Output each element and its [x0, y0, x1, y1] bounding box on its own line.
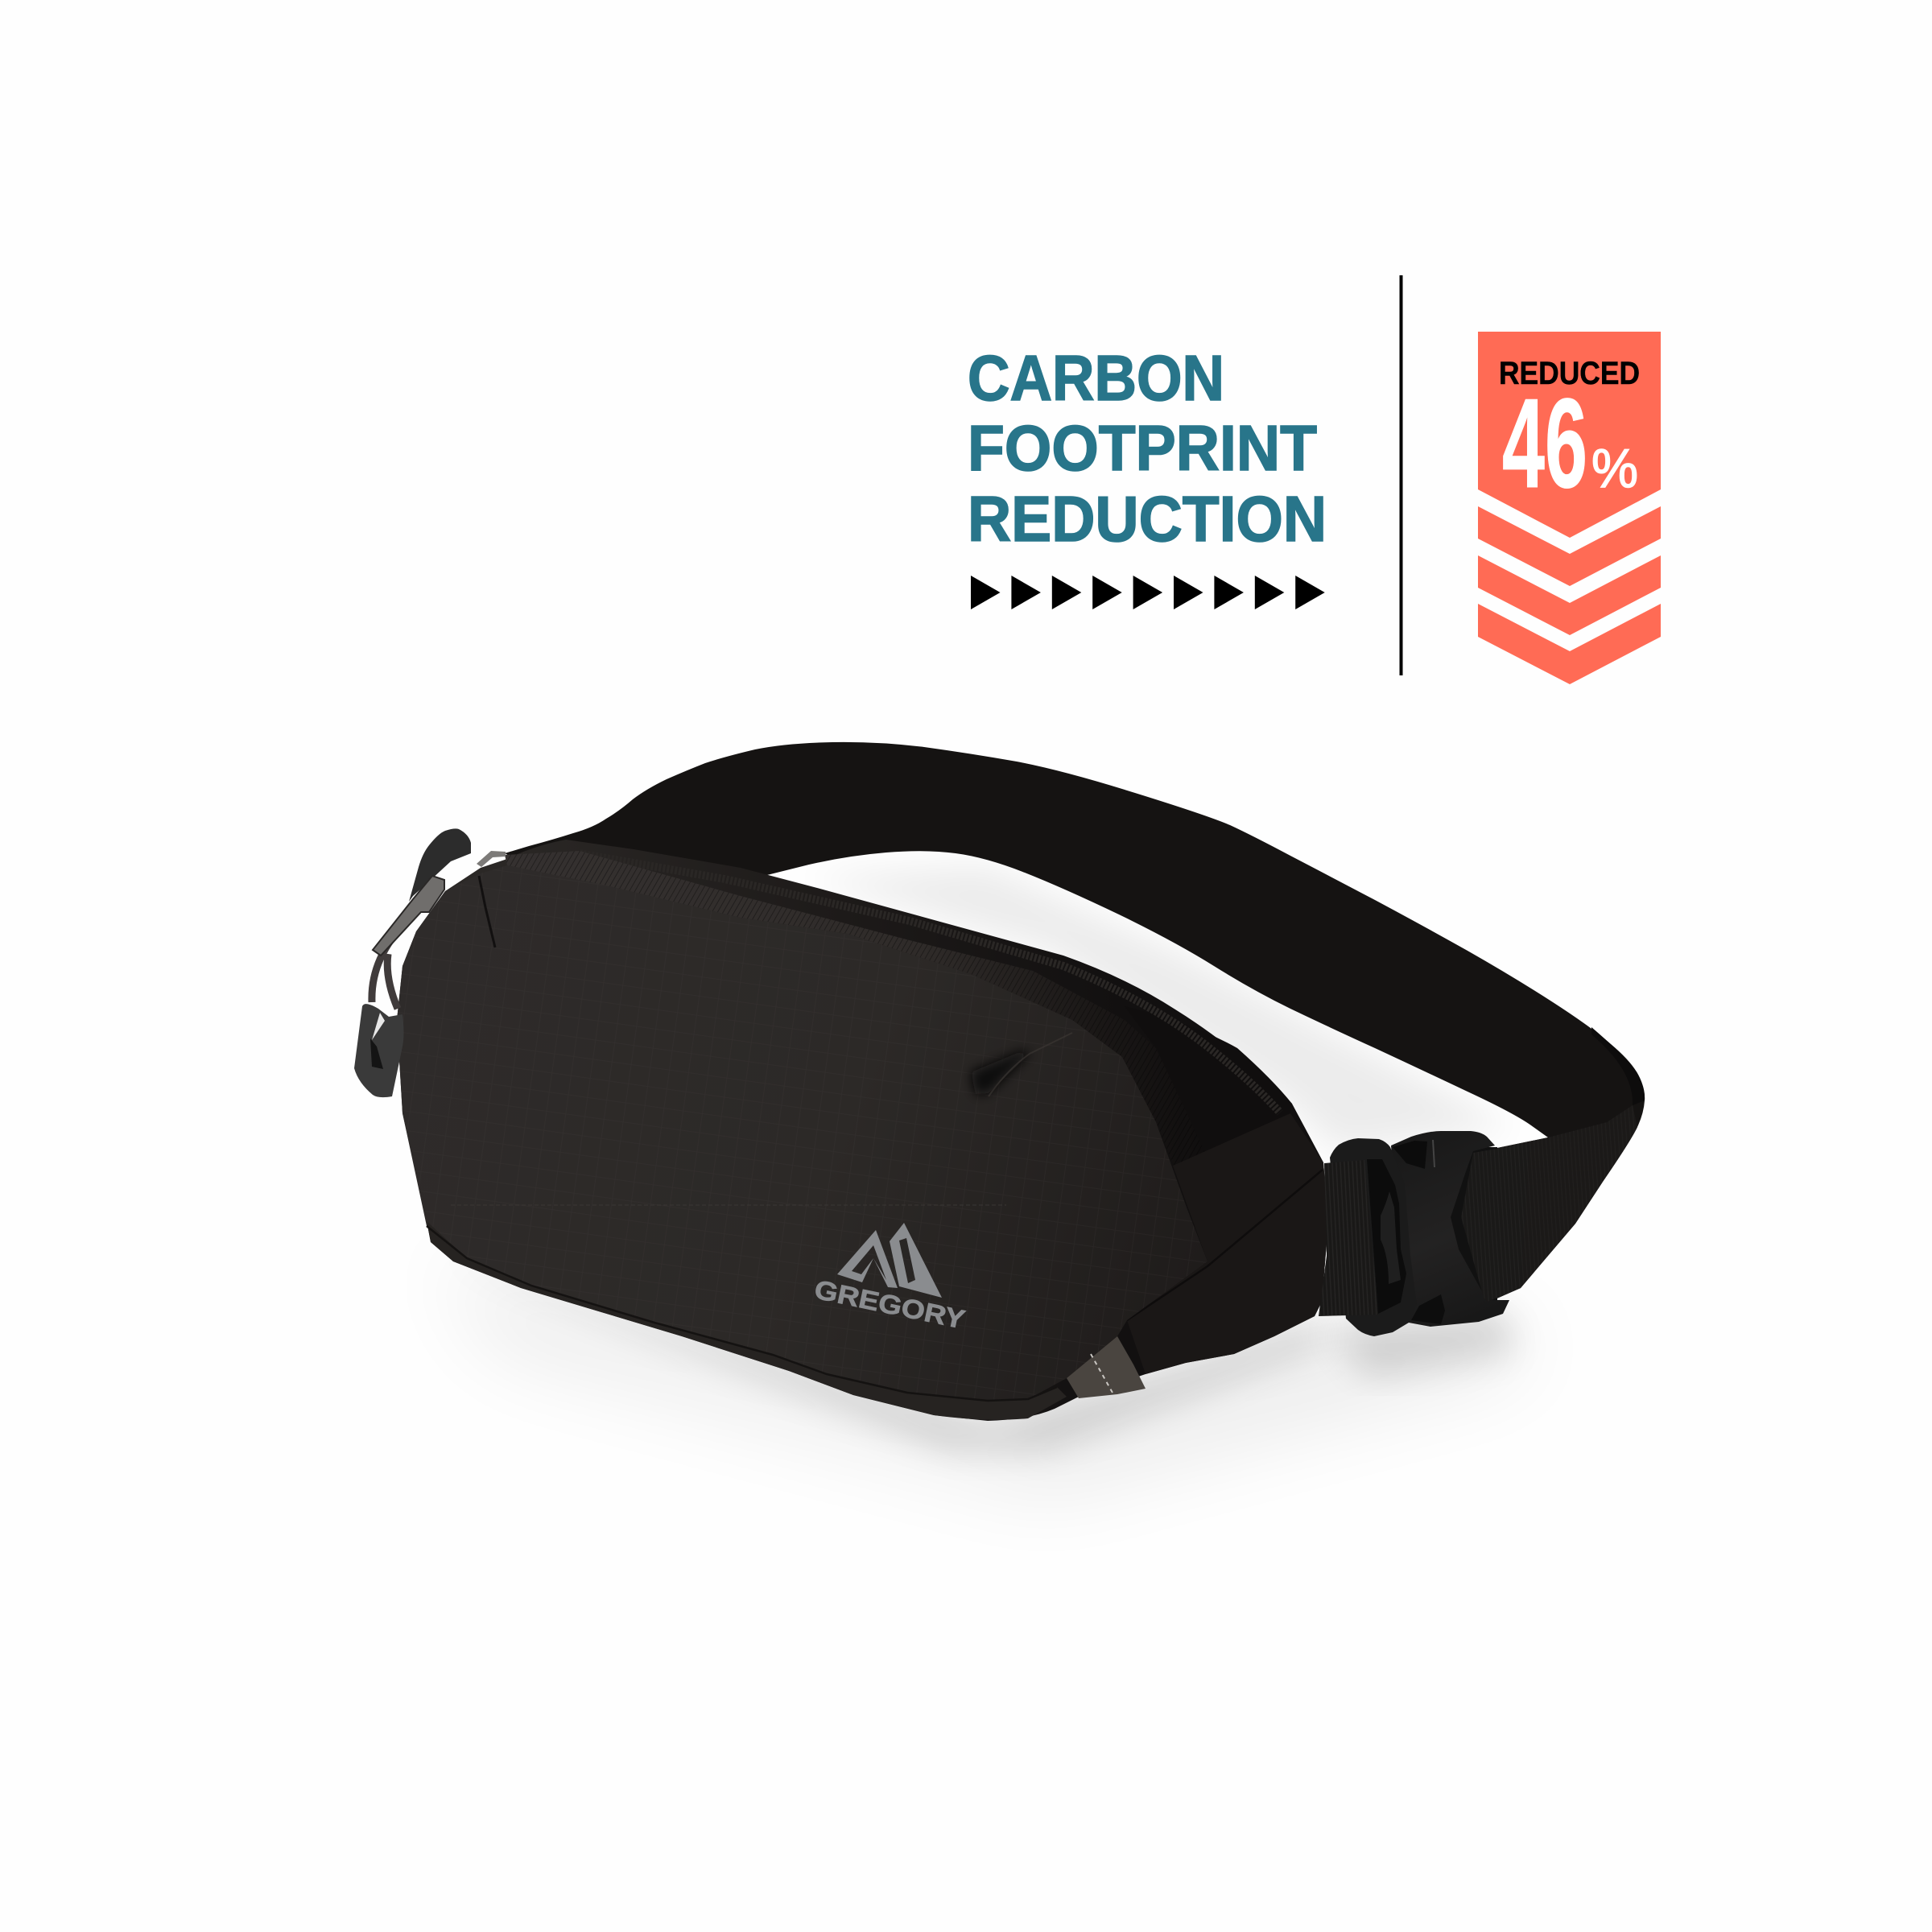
front panel [397, 865, 1208, 1401]
upper plastic clip [409, 828, 471, 902]
waist strap [505, 742, 1645, 1302]
pull cord [372, 922, 407, 1009]
buckle top hole highlight [1433, 1140, 1435, 1167]
badge label: REDUCED [1499, 356, 1640, 391]
bottom seam [427, 1226, 1057, 1401]
badge number: 46 [1502, 373, 1587, 514]
heading: carbon footprint reduction: FOOTPRINT [968, 412, 1317, 484]
buckle female part [1330, 1138, 1417, 1336]
heading: carbon footprint reduction: REDUCTION [968, 483, 1327, 555]
carabiner hook [354, 1004, 404, 1097]
ripstop texture [397, 865, 1208, 1401]
zipper top slider [477, 851, 506, 867]
zipper weave [505, 851, 1208, 1208]
zipper tape [505, 851, 1208, 1208]
strap inner fold [1591, 1027, 1645, 1105]
strap webbing weave [1461, 1143, 1530, 1302]
heading: carbon footprint reduction: CARBON [968, 342, 1224, 414]
logo wordmark: GREGORY [812, 1274, 968, 1335]
strap end webbing [1474, 1105, 1637, 1302]
side gusset panel [1127, 1113, 1328, 1374]
zipper pull [373, 876, 444, 956]
strap end weave [1474, 1105, 1637, 1302]
panel crease highlight [989, 1033, 1072, 1096]
buckle tongue [1381, 1191, 1401, 1284]
buckle top hole [1393, 1141, 1427, 1169]
fabric crease shadow [971, 1051, 1030, 1095]
badge main shape [1478, 332, 1661, 538]
bottom webbing tab [1067, 1336, 1146, 1398]
heading: carbon footprint reduction [968, 342, 1327, 555]
buckle [1319, 1131, 1530, 1336]
stitch line [451, 1204, 1006, 1206]
gusset seam [1127, 1170, 1323, 1320]
upper pocket panel [1125, 1006, 1292, 1158]
badge: reduced 46% [1478, 332, 1661, 684]
buckle backing [1433, 1147, 1497, 1320]
zipper hardware [354, 828, 506, 1097]
logo mountain mark [837, 1223, 942, 1298]
strap webbing over buckle [1461, 1143, 1530, 1302]
badge chevron stripes [1478, 506, 1661, 684]
upper zipper teeth [580, 853, 1280, 1113]
hook inner slit [370, 1038, 383, 1069]
bag body [397, 840, 1328, 1421]
arrow row [971, 576, 1325, 609]
buckle male part [1391, 1131, 1509, 1327]
buckle webbing weave [1319, 1160, 1378, 1316]
buckle bottom hole [1411, 1294, 1445, 1324]
buckle webbing loop [1319, 1160, 1378, 1316]
gregory logo [812, 1223, 968, 1335]
hook opening [372, 1013, 385, 1040]
floor shadows [435, 865, 1530, 1497]
buckle slot [1367, 1159, 1406, 1314]
badge percent sign: % [1591, 438, 1638, 499]
product photo: waist bag [354, 742, 1645, 1497]
top left pleat [479, 876, 495, 947]
divider line [1399, 275, 1402, 675]
bottom binding [427, 1221, 1067, 1420]
